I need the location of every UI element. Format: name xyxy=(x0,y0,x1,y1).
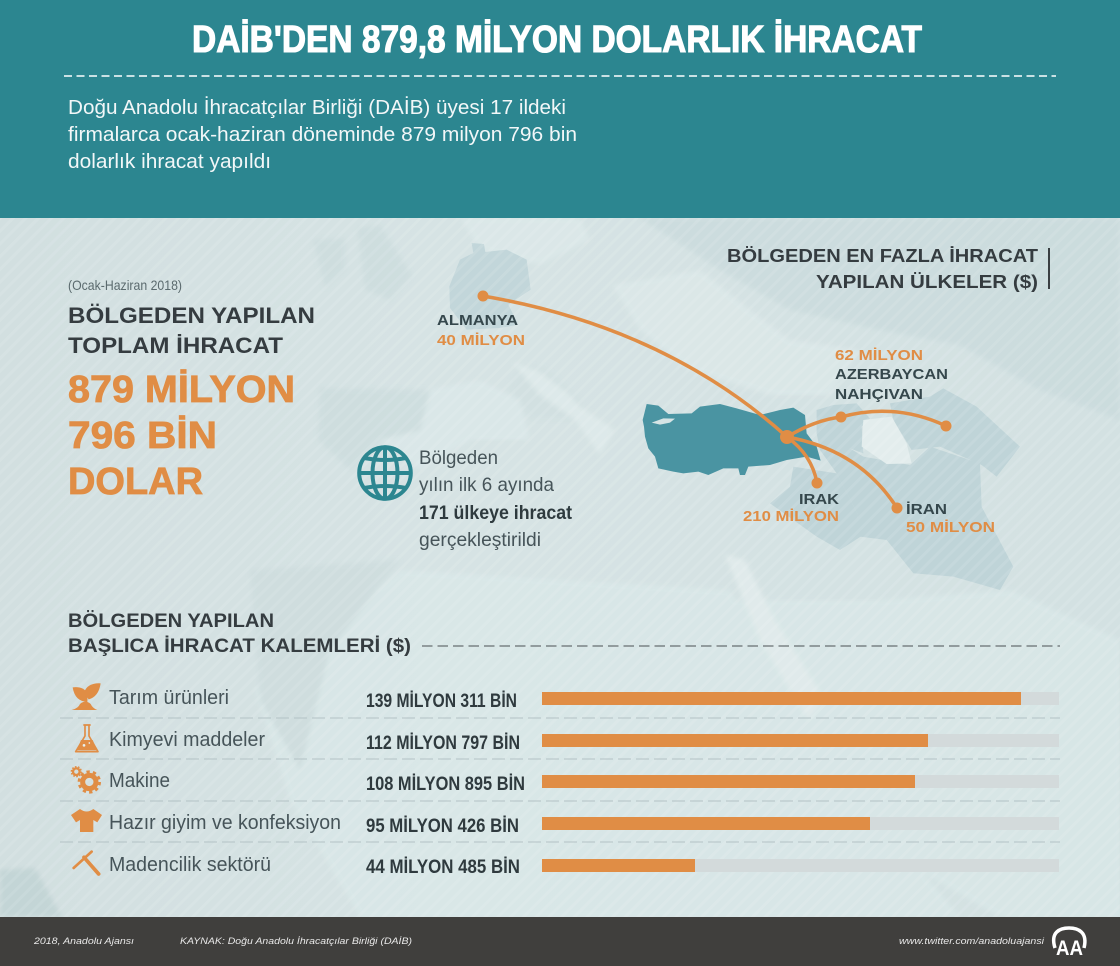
footer copyright: 2018, Anadolu Ajansı xyxy=(33,936,134,947)
hub marker xyxy=(780,430,794,444)
row: agriculture xyxy=(72,683,1059,712)
arrow: Iran route xyxy=(787,437,902,514)
171 countries callout: Bölgeden xyxy=(419,447,498,469)
map: Caspian Sea xyxy=(862,417,912,464)
countries heading xyxy=(727,245,1050,292)
row: machinery: Makine xyxy=(109,769,170,792)
row: chemicals: Kimyevi maddeler xyxy=(109,728,265,751)
label: Azerbaijan: NAHÇIVAN xyxy=(835,386,923,403)
label: Iraq: 210 MİLYON xyxy=(743,508,839,525)
row: machinery: 108 MİLYON 895 BİN xyxy=(366,774,525,795)
map: Azerbaijan region xyxy=(817,403,870,453)
export items heading: BÖLGEDEN YAPILAN xyxy=(68,609,274,632)
icon: AA logo xyxy=(1054,928,1085,960)
icon: flask xyxy=(76,725,98,752)
row: mining xyxy=(74,852,1059,878)
171 countries callout: gerçekleştirildi xyxy=(419,529,541,551)
total export heading: BÖLGEDEN YAPILAN xyxy=(68,303,315,328)
row: chemicals xyxy=(76,725,1059,754)
arrow: Iraq route xyxy=(787,437,822,488)
footer xyxy=(0,917,1120,966)
footer link: www.twitter.com/anadoluajansi xyxy=(899,936,1045,947)
label: Azerbaijan: AZERBAYCAN xyxy=(835,366,948,383)
title: DAİB'DEN 879,8 MİLYON DOLARLIK İHRACAT xyxy=(192,19,922,61)
icon: globe xyxy=(359,447,411,499)
row: agriculture: 139 MİLYON 311 BİN xyxy=(366,691,517,712)
map: Iraq xyxy=(770,467,861,550)
export routes map xyxy=(478,290,952,514)
export items list xyxy=(71,683,1059,878)
label: Iran xyxy=(906,501,995,536)
total export block xyxy=(68,277,315,503)
label: Azerbaijan xyxy=(835,347,948,403)
171 countries callout: yılın ilk 6 ayında xyxy=(419,474,554,496)
map: Turkmenistan region xyxy=(890,388,1020,477)
map: Iran xyxy=(817,433,1013,590)
icon: shirt xyxy=(71,809,102,832)
intro text: firmalarca ocak-haziran döneminde 879 milyon 796 bin xyxy=(68,123,577,146)
diagonal stripe overlay xyxy=(0,218,1120,917)
total export amount: 796 BİN xyxy=(68,415,217,457)
label: Germany xyxy=(437,312,525,349)
row: mining: 44 MİLYON 485 BİN xyxy=(366,857,520,878)
total export amount: DOLAR xyxy=(68,461,203,503)
map: Germany xyxy=(449,243,531,330)
171 countries callout: 171 ülkeye ihracat xyxy=(419,502,572,524)
171 countries callout xyxy=(419,447,572,551)
total export heading: TOPLAM İHRACAT xyxy=(68,333,284,358)
label: Iraq: IRAK xyxy=(799,491,839,508)
export items heading: BAŞLICA İHRACAT KALEMLERİ ($) xyxy=(68,634,411,657)
total export amount: 879 MİLYON xyxy=(68,369,295,411)
export items heading xyxy=(68,609,1060,657)
label: Iran: İRAN xyxy=(906,501,947,518)
row: chemicals: 112 MİLYON 797 BİN xyxy=(366,733,520,754)
arrow: Germany route xyxy=(478,290,787,437)
map: neighbouring regions xyxy=(770,388,1020,590)
label: Iraq xyxy=(743,491,839,525)
row: mining: Madencilik sektörü xyxy=(109,853,271,876)
intro text: Doğu Anadolu İhracatçılar Birliği (DAİB) üyesi 17 ildeki xyxy=(68,96,566,119)
map: Turkey xyxy=(643,404,821,475)
footer source: KAYNAK: Doğu Anadolu İhracatçılar Birliği (DAİB) xyxy=(180,936,412,947)
period note: (Ocak-Haziran 2018) xyxy=(68,277,182,293)
row: apparel: Hazır giyim ve konfeksiyon xyxy=(109,811,341,834)
countries heading: BÖLGEDEN EN FAZLA İHRACAT xyxy=(727,245,1039,266)
total export heading xyxy=(68,303,315,358)
row: agriculture: Tarım ürünleri xyxy=(109,686,229,709)
label: Azerbaijan: 62 MİLYON xyxy=(835,347,923,364)
icon: pickaxe xyxy=(74,852,99,874)
row: machinery xyxy=(71,767,1059,795)
countries heading: YAPILAN ÜLKELER ($) xyxy=(816,271,1038,292)
intro text xyxy=(68,96,577,173)
arrow: Azerbaijan and Nakhchivan route xyxy=(787,411,952,437)
label: Iran: 50 MİLYON xyxy=(906,519,995,536)
total export amount xyxy=(68,369,295,503)
row: apparel: 95 MİLYON 426 BİN xyxy=(366,816,519,837)
icon: gears xyxy=(71,767,100,792)
row: apparel xyxy=(71,809,1059,837)
map background panel xyxy=(0,218,1120,917)
header band xyxy=(0,0,1120,218)
icon: AA logo: AA xyxy=(1056,937,1083,960)
label: Germany: 40 MİLYON xyxy=(437,332,525,349)
intro text: dolarlık ihracat yapıldı xyxy=(68,150,271,173)
icon: plant xyxy=(72,683,101,710)
label: Germany: ALMANYA xyxy=(437,312,518,329)
